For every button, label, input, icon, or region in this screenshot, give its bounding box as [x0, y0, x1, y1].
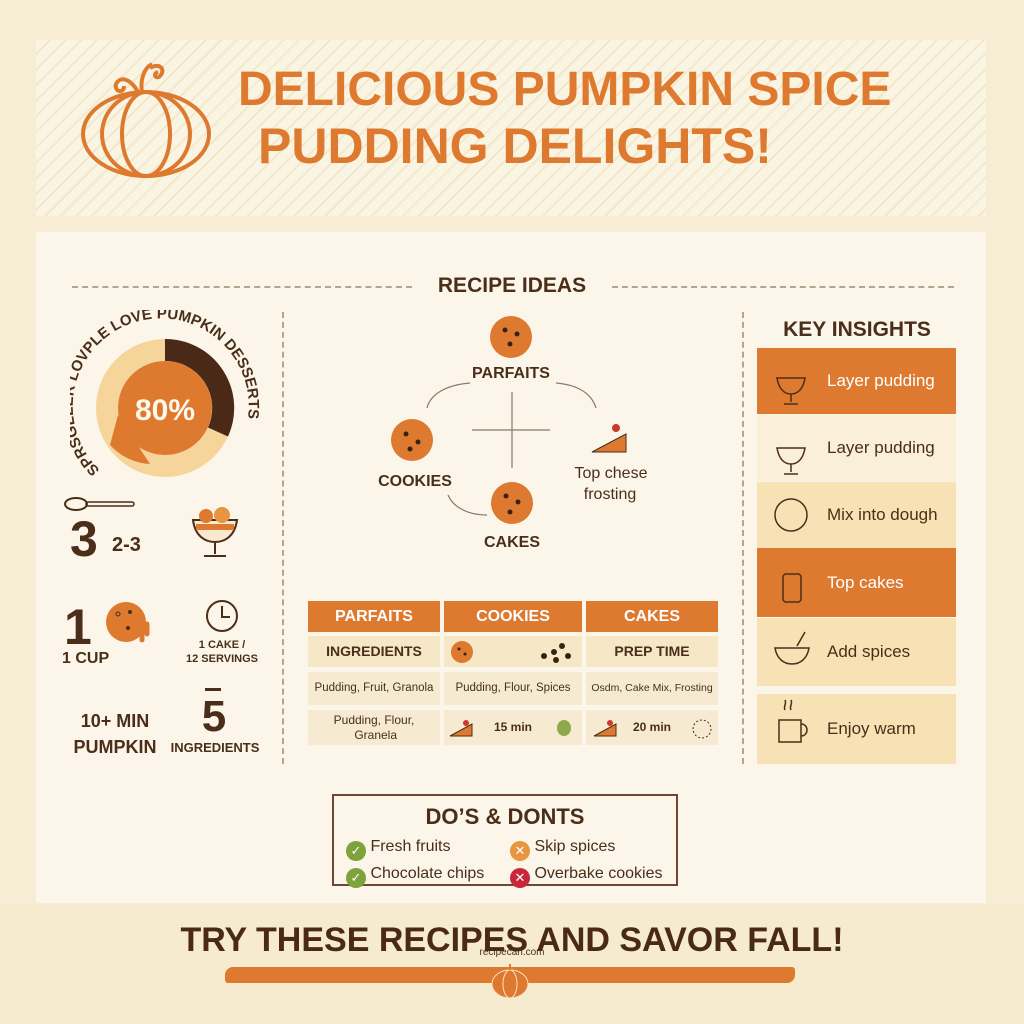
- table: recipes: Pudding, Fruit, Granola: [315, 682, 433, 694]
- box: do's and donts: Chocolate chips: [370, 865, 484, 882]
- table: recipes: Pudding, Flour, Spices: [455, 682, 571, 694]
- header panel: [36, 40, 986, 216]
- list: key insights: Add spices: [827, 642, 910, 661]
- diagram: recipe ideas: Top chese: [575, 465, 648, 482]
- stat: 1 cup: [62, 599, 150, 667]
- footer banner: [0, 905, 1024, 1024]
- box: do's and donts: Skip spices: [534, 838, 615, 855]
- box: do's and donts: Fresh fruits: [370, 838, 450, 855]
- diagram: recipe ideas: COOKIES: [378, 473, 452, 490]
- heading: recipe ideas: RECIPE IDEAS: [438, 274, 586, 297]
- stat: 3: 2-3: [112, 534, 141, 556]
- list: key insights: Enjoy warm: [827, 719, 916, 738]
- stat: 1 cake / 12 servings: 1 CAKE /: [199, 639, 245, 651]
- stat: 1 cake / 12 servings: 12 SERVINGS: [186, 653, 258, 665]
- table: recipes: 20 min: [633, 720, 671, 734]
- diagram: recipe ideas: frosting: [584, 486, 636, 503]
- list: key insights: Layer pudding: [827, 438, 935, 457]
- stat: 10+ min pumpkin: [73, 711, 156, 757]
- list: key insights: Layer pudding: [827, 371, 935, 390]
- table: recipes: PARFAITS: [335, 608, 413, 625]
- stat: 10+ min pumpkin: PUMPKIN: [73, 737, 156, 757]
- box: do's and donts: [332, 794, 678, 886]
- stat: 1 cake / 12 servings: [186, 600, 258, 665]
- box: do's and donts: ✕: [515, 870, 525, 885]
- chart: donut 80%: 80%: [135, 394, 195, 427]
- table: recipes: Granela: [354, 728, 397, 742]
- stat: 1 cup: 1: [64, 599, 92, 655]
- diagram: recipe ideas: PARFAITS: [472, 365, 550, 382]
- icon: parfait: [192, 507, 238, 557]
- box: do's and donts: Overbake cookies: [534, 865, 663, 882]
- stat: 5 ingredients: 5: [202, 692, 226, 741]
- heading: key insights: KEY INSIGHTS: [783, 318, 931, 341]
- table: recipes: [308, 601, 718, 745]
- table: recipes: CAKES: [624, 608, 680, 625]
- table: recipes: Osdm, Cake Mix, Frosting: [591, 682, 713, 694]
- header panel: PUDDING DELIGHTS!: [258, 118, 772, 174]
- icon: pumpkin: [81, 62, 211, 178]
- box: do's and donts: ✕: [515, 843, 525, 858]
- table: recipes: COOKIES: [476, 608, 550, 625]
- footer banner: recipecan.com: [479, 947, 545, 958]
- diagram: recipe ideas: [378, 316, 648, 551]
- stat: 1 cup: 1 CUP: [62, 650, 109, 667]
- box: do's and donts: ✓: [351, 843, 361, 858]
- list: key insights: Top cakes: [827, 573, 904, 592]
- table: recipes: Pudding, Flour,: [334, 713, 414, 727]
- stat: 3: [64, 497, 141, 567]
- list: key insights: Mix into dough: [827, 505, 938, 524]
- footer banner: TRY THESE RECIPES AND SAVOR FALL!: [180, 921, 844, 959]
- main panel: [36, 232, 986, 903]
- stat: 10+ min pumpkin: 10+ MIN: [81, 711, 149, 731]
- table: recipes: PREP TIME: [614, 643, 690, 659]
- stat: 5 ingredients: INGREDIENTS: [171, 740, 259, 755]
- box: do's and donts: ✓: [351, 870, 361, 885]
- table: recipes: INGREDIENTS: [326, 643, 422, 659]
- table: recipes: 15 min: [494, 720, 532, 734]
- title: DELICIOUS PUMPKIN SPICE: [238, 63, 891, 116]
- stat: 3: 3: [70, 511, 98, 567]
- diagram: recipe ideas: CAKES: [484, 534, 540, 551]
- list: key insights: [757, 348, 956, 764]
- box: do's and donts: DO’S & DONTS: [426, 804, 584, 829]
- stat: 5 ingredients: [171, 688, 259, 755]
